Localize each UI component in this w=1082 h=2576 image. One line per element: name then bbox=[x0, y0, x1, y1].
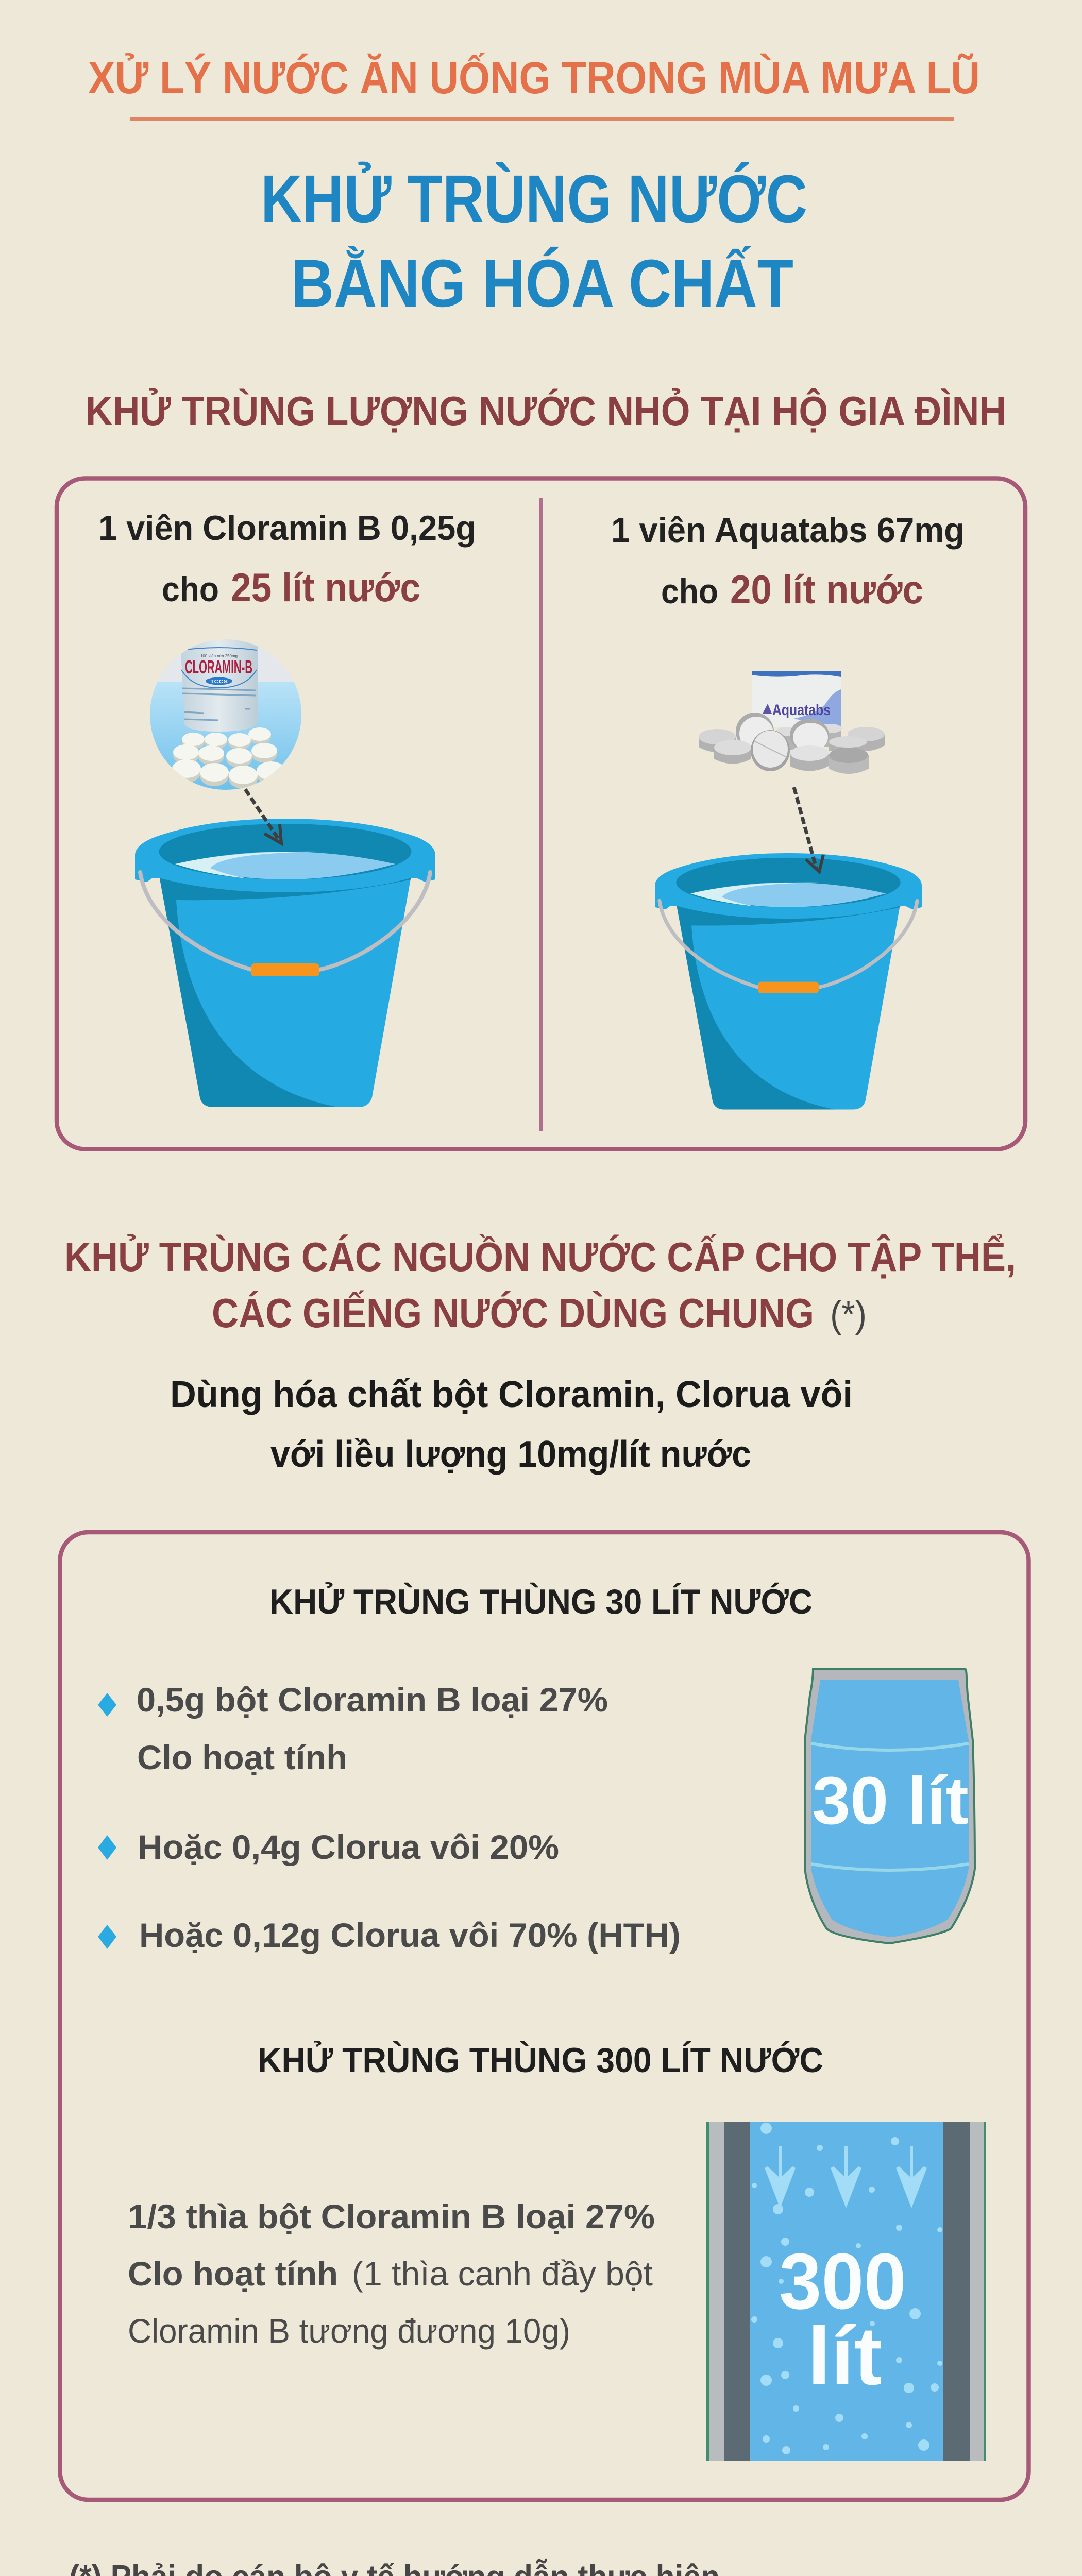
icon: Aquatabs packet and tablets: Aquatabs bbox=[772, 702, 831, 719]
arrow: Cloramin into bucket bbox=[245, 789, 281, 843]
icon: 300 litre tank: 300 bbox=[779, 2237, 906, 2326]
arrow: Aquatabs into bucket bbox=[794, 787, 823, 872]
text: 300 litre dose bbox=[128, 2197, 655, 2350]
list: 30 litre doses: Hoặc 0,12g Clorua vôi 70% (HTH) bbox=[139, 1916, 681, 1954]
icon: bucket 1 bbox=[135, 819, 435, 1107]
text: Aquatabs dose: cho bbox=[661, 572, 718, 611]
section heading: household: KHỬ TRÙNG LƯỢNG NƯỚC NHỎ TẠI HỘ GIA ĐÌNH bbox=[86, 388, 1006, 434]
main title: KHỬ TRÙNG NƯỚC bbox=[261, 161, 807, 236]
panel: tank disinfection bbox=[60, 1532, 1028, 2500]
text: 300 litre dose: 1/3 thìa bột Cloramin B loại 27% bbox=[128, 2197, 655, 2235]
icon: bucket 2 bbox=[655, 853, 922, 1110]
icon: 300 litre tank bbox=[706, 2122, 986, 2461]
panel: household doses bbox=[57, 478, 1025, 1149]
section heading: shared water sources: (*) bbox=[830, 1294, 867, 1335]
icon: 30 litre barrel: 30 lít bbox=[812, 1762, 969, 1838]
icon: Cloramin-B bottle and tablets: CLORAMIN-B bbox=[185, 656, 252, 677]
text: 300 litre dose: Cloramin B tương đương 10g) bbox=[128, 2312, 570, 2350]
icon: Cloramin-B bottle and tablets: 100 viên nén 250mg bbox=[200, 654, 238, 658]
text: chemical dosage: với liều lượng 10mg/lít nước bbox=[270, 1434, 751, 1475]
text: Aquatabs dose: 20 lít nước bbox=[730, 567, 923, 612]
heading: 300 litre tank: KHỬ TRÙNG THÙNG 300 LÍT NƯỚC bbox=[258, 2040, 823, 2080]
icon: 300 litre tank: lít bbox=[807, 2310, 882, 2402]
text: Aquatabs dose bbox=[611, 511, 965, 612]
icon: Cloramin-B bottle and tablets bbox=[150, 639, 302, 790]
main title: BẰNG HÓA CHẤT bbox=[291, 245, 793, 321]
text: Cloramin B dose bbox=[98, 509, 476, 610]
list: 30 litre doses bbox=[98, 1681, 681, 1954]
list: 30 litre doses: Hoặc 0,4g Clorua vôi 20% bbox=[138, 1828, 559, 1866]
kicker heading: XỬ LÝ NƯỚC ĂN UỐNG TRONG MÙA MƯA LŨ bbox=[88, 53, 980, 103]
text: Aquatabs dose: 1 viên Aquatabs 67mg bbox=[611, 511, 965, 550]
section heading: shared water sources: CÁC GIẾNG NƯỚC DÙNG CHUNG bbox=[212, 1290, 814, 1336]
icon: Cloramin-B bottle and tablets: TCCS bbox=[210, 679, 228, 685]
list: 30 litre doses: 0,5g bột Cloramin B loại 27% bbox=[137, 1681, 608, 1719]
heading: 30 litre tank: KHỬ TRÙNG THÙNG 30 LÍT NƯỚC bbox=[269, 1582, 813, 1621]
section heading: shared water sources bbox=[64, 1234, 1016, 1336]
text: 300 litre dose: (1 thìa canh đầy bột bbox=[352, 2255, 653, 2293]
list: 30 litre doses: Clo hoạt tính bbox=[137, 1738, 347, 1776]
text: Cloramin B dose: 25 lít nước bbox=[231, 565, 420, 610]
text: 300 litre dose: Clo hoạt tính bbox=[128, 2255, 338, 2293]
icon: down arrows bbox=[765, 2146, 927, 2208]
icon: Aquatabs packet and tablets bbox=[699, 671, 885, 774]
text: chemical dosage: Dùng hóa chất bột Cloramin, Clorua vôi bbox=[170, 1374, 853, 1415]
icon: 30 litre barrel bbox=[805, 1669, 975, 1943]
text: Cloramin B dose: cho bbox=[162, 570, 219, 609]
text: chemical dosage bbox=[170, 1374, 853, 1475]
text: Cloramin B dose: 1 viên Cloramin B 0,25g bbox=[98, 509, 476, 548]
main title bbox=[261, 161, 807, 321]
